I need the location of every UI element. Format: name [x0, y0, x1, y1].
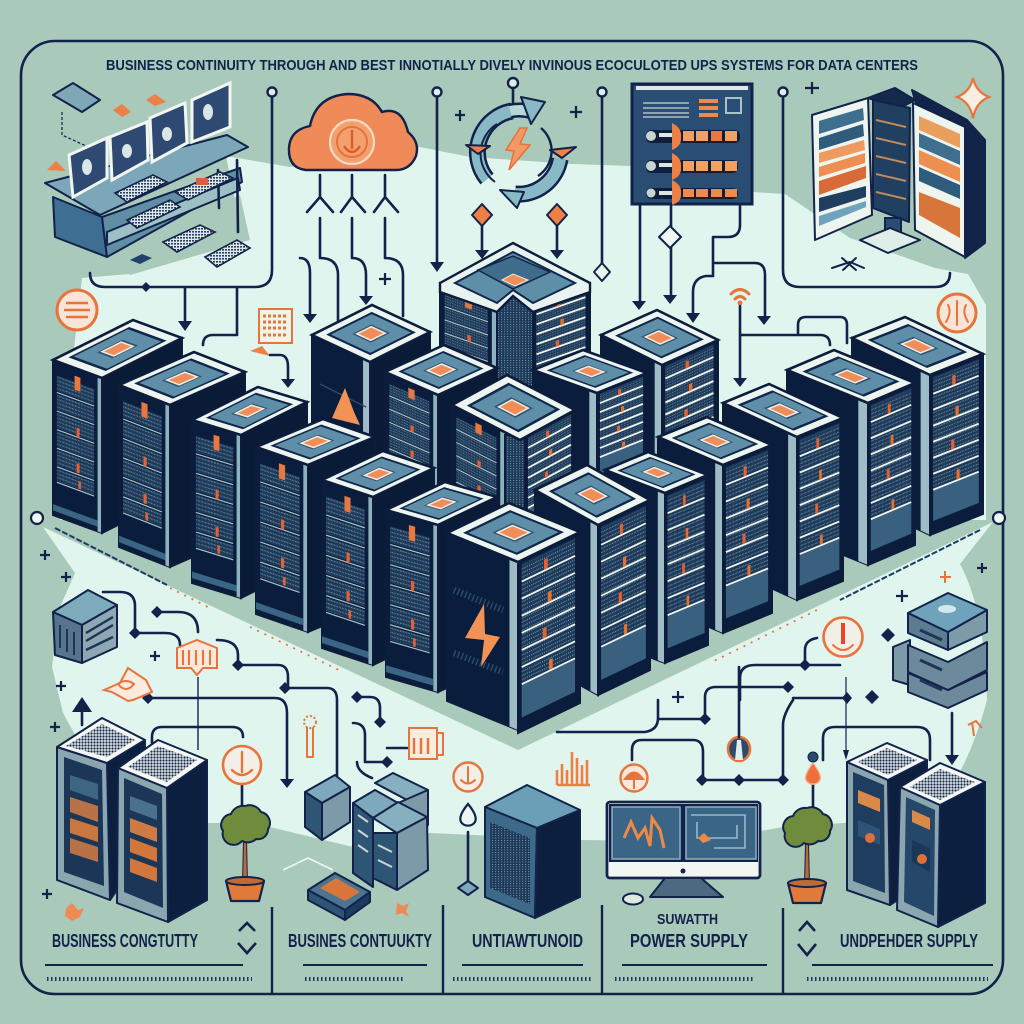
icon: orange torch: [304, 716, 316, 757]
icon: orange bars: [557, 752, 590, 785]
terminal circles: [31, 512, 1005, 524]
icon: orange pages: [409, 728, 443, 759]
connector network: lower left: [72, 592, 407, 820]
icon: orange badge right: [938, 294, 976, 332]
icon: tree left: [221, 805, 270, 901]
icon: small orange marks: [65, 903, 409, 921]
icon: drop and stem: [458, 804, 478, 895]
rack: left 4: [256, 419, 375, 632]
rack: left 2: [119, 352, 245, 567]
icon: orange sparks right: [940, 571, 982, 736]
dashed perimeter lines: [55, 528, 980, 600]
icon: desktop monitor: [607, 802, 760, 904]
label: business continuity 2: BUSINES CONTUUKTY: [288, 931, 432, 951]
icon: middle server box: [485, 785, 580, 918]
connectors from panel: [640, 205, 765, 318]
light wash: upper: [60, 147, 986, 520]
forked connectors under cloud: [307, 175, 398, 212]
title: BUSINESS CONTINUITY THROUGH AND BEST INNOTIALLY DIVELY INVINOUS ECOCULOTED UPS SYSTEMS FOR DATA CENTERS: [106, 57, 918, 74]
rack: right 2: [787, 350, 915, 565]
rack: right 5: [605, 452, 708, 663]
label: power supply: POWER SUPPLY: [630, 931, 748, 951]
arrowheads: [178, 250, 771, 388]
icon: orange badge left: [57, 290, 97, 330]
icon: orange gate: [177, 640, 217, 675]
icon: lower-left server pair: [57, 718, 207, 922]
label: suwatth: SUWATTH: [657, 911, 718, 928]
connectors: circle terminals: [90, 88, 950, 345]
column dividers: [272, 905, 783, 993]
rack: right 4: [658, 417, 772, 633]
connectors to server cluster: [300, 218, 403, 320]
rack: centre: [452, 375, 575, 542]
icon: stacked units: [893, 593, 987, 708]
icon: control desk with monitors: [45, 83, 250, 275]
icon: right server pair: [847, 743, 985, 927]
icon: orange scroll: [104, 668, 152, 701]
server racks cluster: [53, 243, 983, 733]
icon: orange document: [250, 309, 292, 380]
icon: mini servers: [305, 773, 428, 890]
icon: orange badge mid: [620, 764, 648, 792]
connector network: lower right: [557, 638, 959, 819]
icon: cloud with alert: [289, 94, 417, 170]
rack: left 6: [386, 482, 497, 692]
icon: orange bulb: [806, 752, 820, 784]
icon: orange alert circles: [223, 618, 862, 792]
orange diamonds with stems: [472, 204, 567, 252]
rack: back left with lightning: [312, 305, 430, 492]
light wash: lower: [43, 522, 993, 847]
icon: low device: [283, 858, 370, 920]
footer rules: [45, 964, 993, 966]
rack: left 5: [322, 451, 434, 665]
rack: back centre: [440, 243, 590, 413]
icon: lamp badge: [728, 737, 750, 761]
rack: left 3: [192, 387, 307, 598]
rack: right 3: [723, 384, 843, 600]
small plus marks: [40, 82, 987, 899]
icon: wifi signal: [731, 290, 847, 380]
icon: control panel with sliders: [632, 84, 752, 205]
footer microtext marks: [47, 977, 988, 981]
icon: recycle ring with lightning: [466, 78, 576, 208]
rack: right 6: [535, 465, 650, 695]
icon: chevrons: [238, 923, 256, 953]
icon: navy diamonds: [865, 628, 895, 704]
icon: tree right: [783, 807, 832, 903]
rack: front with lightning: [447, 503, 580, 733]
rack: upper middle right: [533, 350, 647, 483]
icon: open server cabinet: [812, 78, 989, 270]
rack: far right: [852, 317, 983, 535]
orange dashed perimeter lines: [170, 588, 817, 672]
rack: back right: [601, 310, 718, 485]
label: undependable supply: UNDPEHDER SUPPLY: [840, 931, 978, 951]
label: uninterrupted: UNTIAWTUNOID: [472, 931, 583, 951]
rack: upper middle left: [385, 345, 497, 505]
rack: far left: [53, 320, 182, 533]
icon: small server left: [53, 590, 117, 663]
label: business continuity: BUSINESS CONGTUTTY: [52, 931, 198, 951]
icon: chevrons right: [798, 922, 816, 955]
